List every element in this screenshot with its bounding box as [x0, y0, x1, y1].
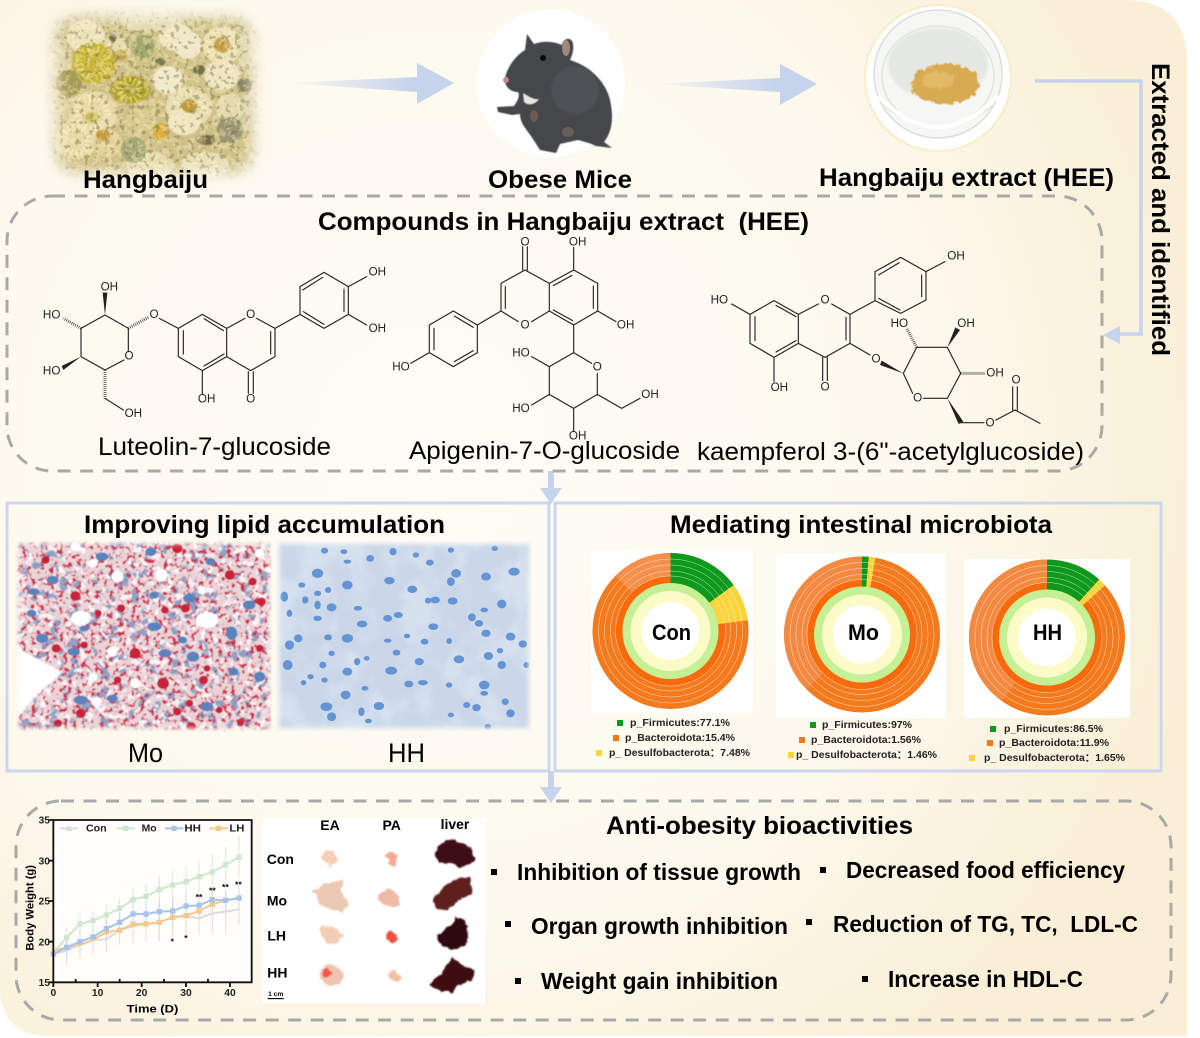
structure: Luteolin-7-glucoside: HO — [43, 365, 60, 378]
series markers — [51, 855, 242, 957]
structure: kaempferol 3-(6"-acetylglucoside): OH — [986, 366, 1004, 379]
panel: improving lipid accumulation — [7, 503, 549, 771]
chart legend: Con — [86, 824, 107, 835]
heading: mediating intestinal microbiota: Mediating intestinal microbiota — [670, 511, 1053, 539]
significance markers: ** — [235, 880, 242, 890]
legend: Con — [596, 717, 751, 759]
structure: Luteolin-7-glucoside: O — [246, 308, 255, 321]
y-axis labels — [38, 816, 50, 989]
significance markers: * — [171, 936, 175, 946]
structure: kaempferol 3-(6"-acetylglucoside): HO — [711, 294, 728, 307]
line chart: body weight — [25, 816, 252, 1015]
series: Con — [53, 909, 239, 954]
structure: kaempferol 3-(6"-acetylglucoside): OH — [957, 317, 975, 330]
chart legend — [60, 824, 244, 835]
label: Hangbaiju: Hangbaiju — [83, 166, 208, 194]
structure: kaempferol 3-(6"-acetylglucoside): O — [820, 380, 830, 393]
structure: Apigenin-7-O-glucoside: O — [593, 360, 602, 373]
label: Extracted and identified: Extracted and identified — [1146, 63, 1174, 356]
structure: Luteolin-7-glucoside: OH — [369, 322, 386, 335]
image: dissected organs: PA — [382, 817, 401, 833]
bullet: decreased food efficiency: Decreased food efficiency — [846, 857, 1125, 883]
image: dissected organs: LH — [267, 928, 286, 944]
chart legend: LH — [229, 824, 244, 835]
structure: Apigenin-7-O-glucoside: OH — [569, 430, 586, 443]
panel: compounds in Hangbaiju extract — [7, 196, 1102, 471]
structure: Luteolin-7-glucoside: OH — [125, 407, 142, 420]
heading: improving lipid accumulation: Improving lipid accumulation — [84, 511, 445, 539]
structure: Luteolin-7-glucoside: O — [246, 392, 255, 405]
legend: Con: p_ Desulfobacterota：7.48% — [609, 747, 751, 759]
y-axis labels: 15 — [38, 978, 50, 989]
structure: kaempferol 3-(6"-acetylglucoside): OH — [771, 381, 788, 394]
legend: Mo: p_Bacteroidota:1.56% — [811, 734, 922, 746]
legend: Mo — [788, 719, 938, 761]
donut chart: HH: HH — [1033, 620, 1062, 645]
x-axis labels: 40 — [224, 988, 236, 999]
x-axis labels — [50, 988, 236, 999]
significance markers: ** — [196, 892, 203, 902]
significance markers — [171, 880, 242, 946]
donut chart: Mo — [776, 553, 946, 718]
axis title: Body Weight (g): Body Weight (g) — [25, 865, 37, 951]
y-axis labels: 35 — [38, 816, 50, 827]
structure: Apigenin-7-O-glucoside: HO — [392, 360, 410, 373]
photo: Hangbaiju dried flowers — [40, 5, 270, 185]
structure: kaempferol 3-(6"-acetylglucoside): O — [871, 352, 881, 365]
structure: Luteolin-7-glucoside: OH — [369, 266, 386, 279]
panel: anti-obesity bioactivities — [16, 801, 1171, 1020]
structure: Luteolin-7-glucoside: O — [124, 350, 134, 363]
label: kaempferol 3-(6"-acetylglucoside): kaempferol 3-(6"-acetylglucoside) — [697, 438, 1084, 466]
image: dissected organs: HH — [267, 964, 287, 980]
structure: kaempferol 3-(6"-acetylglucoside): HO — [891, 317, 908, 330]
legend: Con: p_Firmicutes:77.1% — [630, 717, 731, 729]
bullet: increase in HDL-C: Increase in HDL-C — [888, 966, 1083, 992]
series: LH — [53, 898, 239, 951]
donut chart: Mo: Mo — [848, 620, 879, 645]
panel: mediating intestinal microbiota — [555, 503, 1161, 771]
label: Obese Mice: Obese Mice — [488, 166, 632, 194]
icon: extract in petri dish — [865, 5, 1011, 151]
label: HH: HH — [388, 738, 425, 768]
histology image: HH — [275, 540, 532, 732]
structure: kaempferol 3-(6"-acetylglucoside): O — [985, 416, 995, 429]
chart legend: Mo — [142, 824, 157, 835]
structure: Apigenin-7-O-glucoside: HO — [512, 402, 530, 415]
structure: kaempferol 3-(6"-acetylglucoside): O — [913, 391, 922, 404]
structure: Luteolin-7-glucoside: O — [149, 308, 159, 321]
legend: Mo: p_Firmicutes:97% — [822, 719, 913, 731]
label: Luteolin-7-glucoside: Luteolin-7-glucoside — [98, 433, 331, 461]
arrow: compounds to panels — [540, 471, 562, 504]
arrow: panels to bioactivities — [540, 771, 562, 803]
series: HH — [53, 898, 239, 954]
legend: HH — [969, 723, 1126, 764]
y-axis labels: 30 — [38, 856, 50, 867]
donut chart: HH — [964, 559, 1130, 718]
bullet: weight gain inhibition: Weight gain inhibition — [541, 968, 778, 994]
structure: kaempferol 3-(6"-acetylglucoside): O — [1011, 374, 1021, 387]
bullet: reduction of TG, TC, LDL-C: Reduction of TG, TC, LDL-C — [833, 911, 1138, 937]
significance markers: ** — [222, 882, 229, 892]
structure: Luteolin-7-glucoside: OH — [198, 392, 215, 405]
heading: compounds: Compounds in Hangbaiju extract (HEE) — [318, 208, 809, 236]
structure: Apigenin-7-O-glucoside: OH — [617, 319, 634, 332]
x-axis labels: 20 — [136, 988, 148, 999]
x-axis labels: 30 — [180, 988, 192, 999]
structure: Apigenin-7-O-glucoside: OH — [641, 388, 659, 401]
image: dissected organs: EA — [320, 817, 340, 833]
structure: kaempferol 3-(6"-acetylglucoside): OH — [947, 250, 965, 263]
legend: HH: p_Bacteroidota:11.9% — [999, 737, 1110, 749]
significance markers: * — [184, 933, 188, 943]
y-axis labels: 20 — [38, 937, 50, 948]
y-axis labels: 25 — [38, 897, 50, 908]
chart legend: HH — [184, 824, 201, 835]
structure: Apigenin-7-O-glucoside: O — [520, 235, 530, 248]
icon: obese mouse — [477, 9, 625, 157]
x-axis labels: 0 — [50, 988, 56, 999]
legend: HH: p_Firmicutes:86.5% — [1004, 723, 1104, 735]
label: Mo: Mo — [128, 738, 163, 768]
legend: Con: p_Bacteroidota:15.4% — [625, 732, 736, 744]
donut chart: Con: Con — [652, 620, 691, 645]
histology image: Mo — [14, 540, 272, 732]
structure: kaempferol 3-(6"-acetylglucoside) — [711, 250, 1040, 429]
arrow: mice to extract — [650, 64, 817, 105]
bullet: organ growth inhibition: Organ growth inhibition — [531, 913, 788, 939]
axis title: Time (D): Time (D) — [127, 1003, 179, 1015]
series: Mo — [53, 857, 239, 952]
chart axes — [48, 820, 252, 987]
donut chart: Con — [591, 550, 753, 713]
chart error bars — [67, 837, 239, 965]
label: Hangbaiju extract (HEE): Hangbaiju extract (HEE) — [819, 164, 1114, 192]
image: dissected organs — [262, 816, 485, 1003]
image: dissected organs: liver — [441, 816, 470, 832]
image: dissected organs: Con — [267, 851, 294, 867]
structure: Apigenin-7-O-glucoside: O — [520, 319, 530, 332]
x-axis labels: 10 — [92, 988, 104, 999]
bullet: inhibition of tissue growth: Inhibition of tissue growth — [517, 859, 801, 885]
legend: Mo: p_ Desulfobacterota：1.46% — [796, 749, 938, 761]
structure: Luteolin-7-glucoside: HO — [43, 308, 60, 321]
structure: kaempferol 3-(6"-acetylglucoside): O — [820, 294, 830, 307]
significance markers: ** — [209, 886, 216, 896]
structure: Apigenin-7-O-glucoside: HO — [512, 347, 530, 360]
structure: Apigenin-7-O-glucoside — [392, 235, 659, 443]
heading: anti-obesity bioactivities: Anti-obesity bioactivities — [606, 812, 913, 840]
legend: HH: p_ Desulfobacterota：1.65% — [984, 752, 1126, 764]
image: dissected organs: Mo — [267, 892, 287, 908]
structure: Luteolin-7-glucoside — [43, 266, 386, 420]
arrow: extract to compounds — [1035, 81, 1141, 344]
structure: Apigenin-7-O-glucoside: OH — [569, 235, 586, 248]
structure: Luteolin-7-glucoside: OH — [101, 280, 118, 293]
arrow: flower to mice — [287, 63, 454, 104]
image: dissected organs: 1 cm — [268, 991, 283, 998]
label: Apigenin-7-O-glucoside: Apigenin-7-O-glucoside — [409, 437, 680, 465]
